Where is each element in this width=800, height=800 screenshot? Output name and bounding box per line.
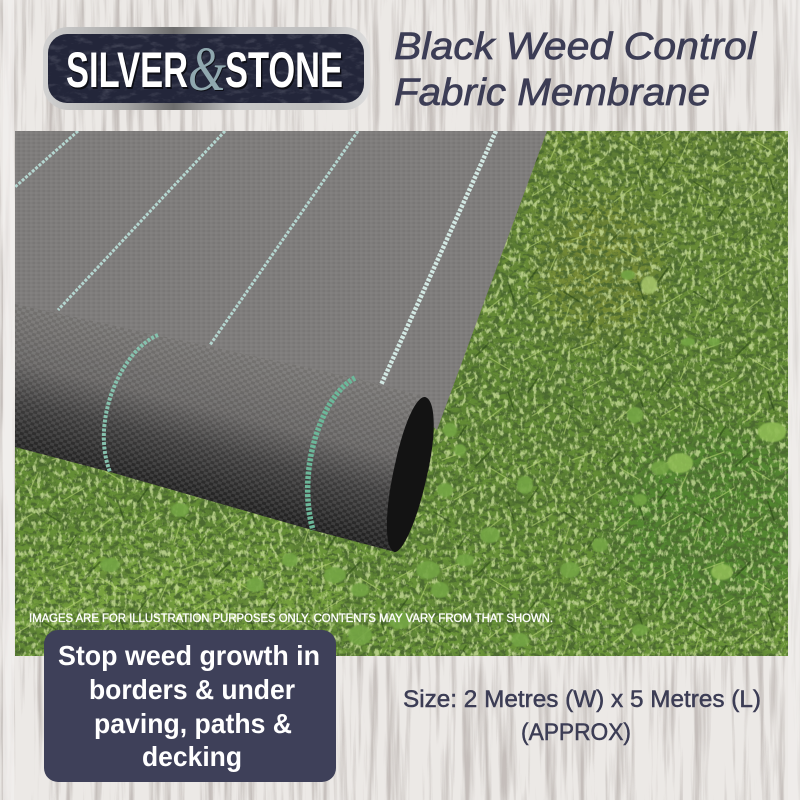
size line 1: Size: 2 Metres (W) x 5 Metres (L) [403, 686, 761, 713]
flat fabric sheet [15, 131, 547, 430]
callout: weed growth [44, 630, 336, 782]
fabric roll body [15, 304, 425, 552]
logo text: Silver: SILVER [66, 42, 188, 98]
callout line 1: Stop weed growth in [58, 640, 320, 671]
size line 2: (APPROX) [521, 719, 631, 746]
callout line 3: paving, paths & [94, 708, 292, 739]
logo: Silver & Stone badge [43, 27, 370, 110]
grass lawn [10, 131, 800, 656]
disclaimer text: IMAGES ARE FOR ILLUSTRATION PURPOSES ONLY. CONTENTS MAY VARY FROM THAT SHOWN. [29, 613, 553, 625]
callout line 4: decking [142, 741, 242, 772]
size information [403, 686, 761, 746]
title [394, 26, 758, 114]
clover leaves [100, 270, 786, 647]
sheet stitch lines [15, 131, 496, 385]
callout line 2: borders & under [89, 674, 295, 705]
roll end [387, 397, 434, 552]
photo: rolled fabric on lawn [10, 131, 800, 656]
logo ampersand: & [188, 36, 226, 104]
roll stitch bands [104, 335, 355, 530]
title line 2: Fabric Membrane [394, 72, 710, 114]
title line 1: Black Weed Control [394, 26, 758, 68]
logo text: Stone: STONE [225, 42, 343, 98]
